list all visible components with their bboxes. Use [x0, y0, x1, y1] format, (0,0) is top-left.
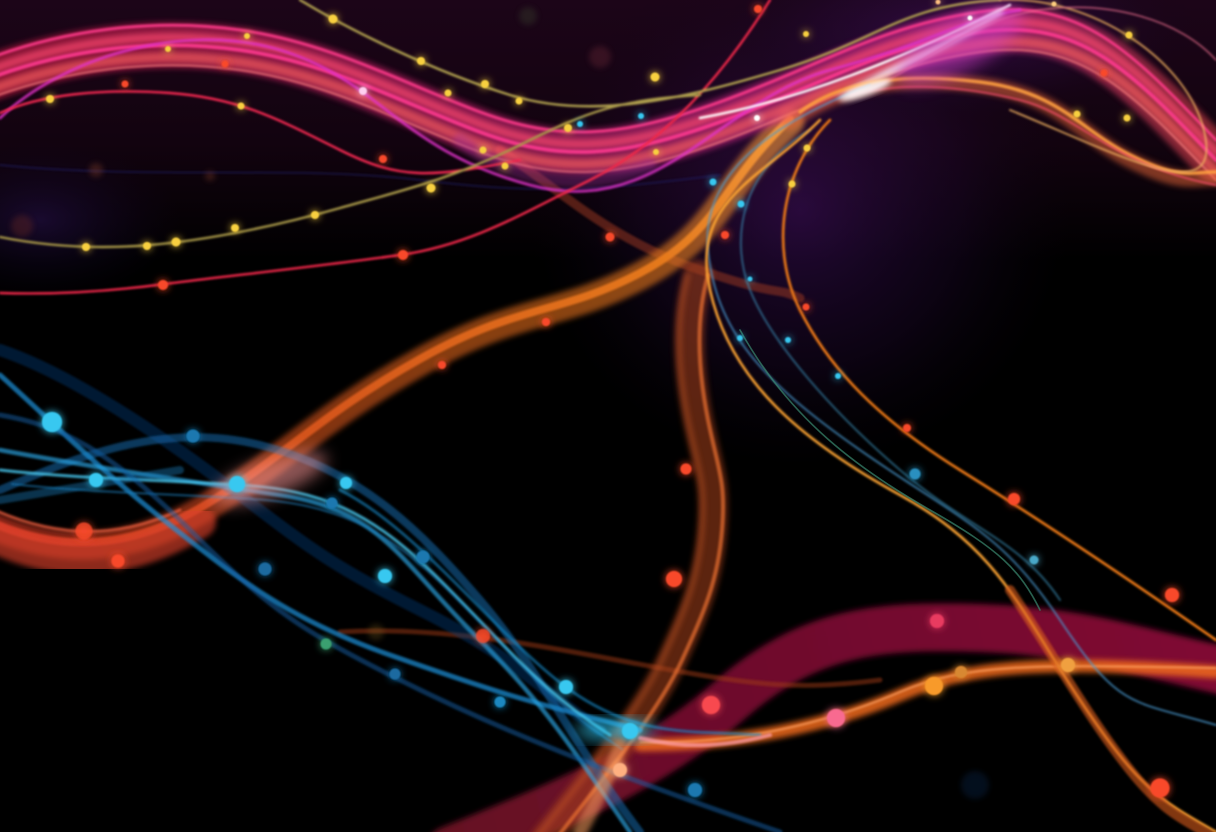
- bright glow at top right: [837, 0, 1034, 105]
- faint blue background strand: [0, 165, 720, 189]
- ribbon: lower-right crimson band: [340, 627, 1216, 832]
- dots: yellow strand: [46, 14, 1132, 251]
- thin strands: right loop: [870, 0, 1216, 172]
- background haze: [0, 0, 1216, 470]
- ribbon: main orange diagonal band: [0, 119, 790, 558]
- ribbon: dark red lower branch from top centre: [500, 150, 800, 298]
- thin strands: top left: [0, 0, 1000, 293]
- light overlap at bottom centre crossing: [575, 720, 770, 832]
- ribbons: blue bundle lower left: [0, 350, 780, 832]
- thin strands: blue and amber curves descending right: [707, 85, 1216, 832]
- ribbon: orange vertical strand: [535, 275, 723, 832]
- dots: cyan and blue: [42, 113, 1038, 797]
- faint out-of-focus dots: [11, 7, 989, 799]
- ribbon: orange and pink band to right edge: [790, 78, 1216, 185]
- ribbon: top pink band: [0, 5, 1216, 191]
- light overlap at lower left crossing: [207, 441, 333, 515]
- dots: white and pale highlights: [359, 0, 1056, 777]
